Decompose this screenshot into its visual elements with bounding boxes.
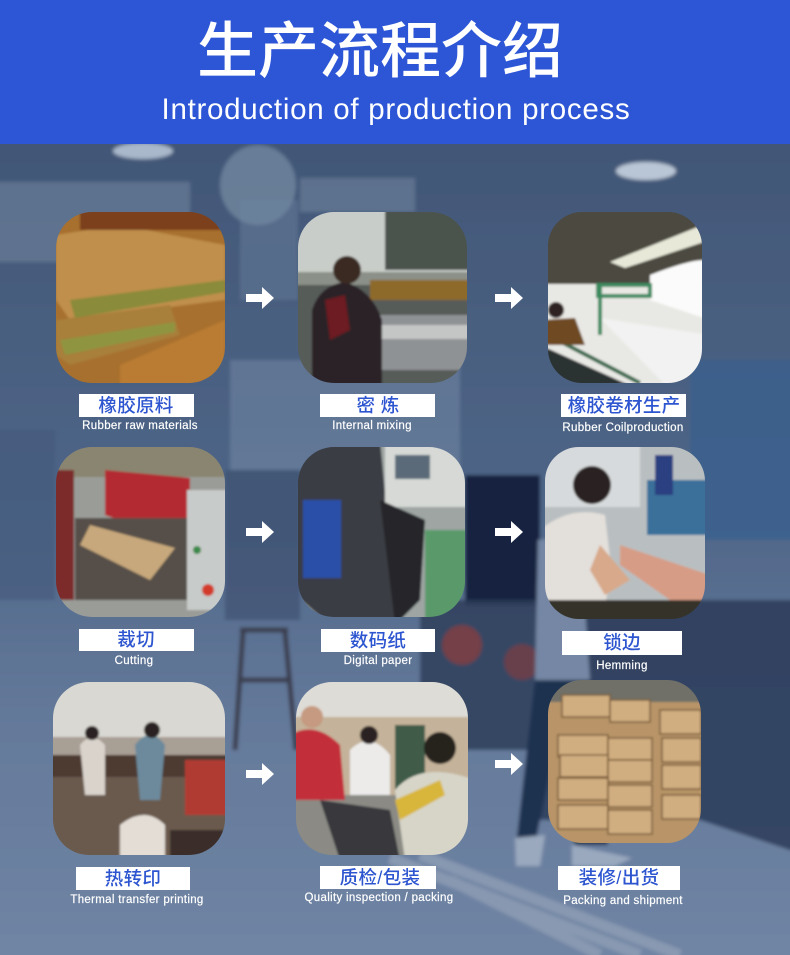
label: 锁边: Hemming — [596, 660, 648, 672]
photo: thermal transfer printing — [53, 682, 225, 855]
label: 密炼: 密 炼 — [356, 395, 400, 416]
title: 生产流程介绍 — [197, 17, 563, 85]
label: 橡胶卷材生产: Rubber Coilproduction — [562, 422, 684, 434]
label: 数码纸 — [321, 629, 435, 667]
label: 质检/包装: Quality inspection / packing — [305, 892, 453, 904]
label: 裁切 — [79, 629, 194, 667]
label: 热转印: Thermal transfer printing — [70, 894, 204, 906]
arrow — [246, 763, 274, 785]
subtitle: Introduction of production process — [162, 93, 630, 126]
photo: packing and shipment — [548, 680, 701, 843]
photo: internal mixing — [298, 212, 467, 383]
photo: hemming — [545, 447, 705, 619]
label: 密炼: Internal mixing — [332, 420, 412, 432]
label: 橡胶卷材生产 — [561, 394, 686, 434]
label: 数码纸: 数码纸 — [350, 630, 406, 651]
header band — [0, 0, 790, 144]
label: 裁切: Cutting — [115, 655, 153, 667]
arrow — [246, 287, 274, 309]
label: 密炼 — [320, 394, 435, 432]
label: 质检/包装 — [305, 866, 453, 904]
label: 质检/包装: 质检/包装 — [340, 867, 420, 888]
photo: cutting — [56, 447, 225, 617]
label: 裁切: 裁切 — [117, 629, 155, 650]
arrow — [495, 287, 523, 309]
photo: quality inspection and packing — [296, 682, 468, 855]
photo: digital paper — [298, 447, 465, 617]
photo: rubber coil production — [548, 212, 702, 383]
label: 橡胶原料: 橡胶原料 — [98, 395, 174, 416]
arrow — [246, 521, 274, 543]
label: 橡胶原料: Rubber raw materials — [82, 420, 198, 432]
photo: rubber raw materials — [56, 212, 225, 383]
label: 数码纸: Digital paper — [344, 655, 412, 667]
label: 橡胶原料 — [79, 394, 198, 432]
arrow — [495, 521, 523, 543]
label: 热转印: 热转印 — [105, 868, 161, 889]
arrow — [495, 753, 523, 775]
label: 装修/出货: Packing and shipment — [563, 895, 683, 907]
label: 热转印 — [70, 867, 204, 906]
label: 装修/出货: 装修/出货 — [579, 867, 659, 888]
label: 锁边: 锁边 — [603, 632, 641, 653]
label: 锁边 — [562, 631, 682, 672]
label: 装修/出货 — [558, 866, 683, 907]
label: 橡胶卷材生产: 橡胶卷材生产 — [568, 395, 680, 416]
